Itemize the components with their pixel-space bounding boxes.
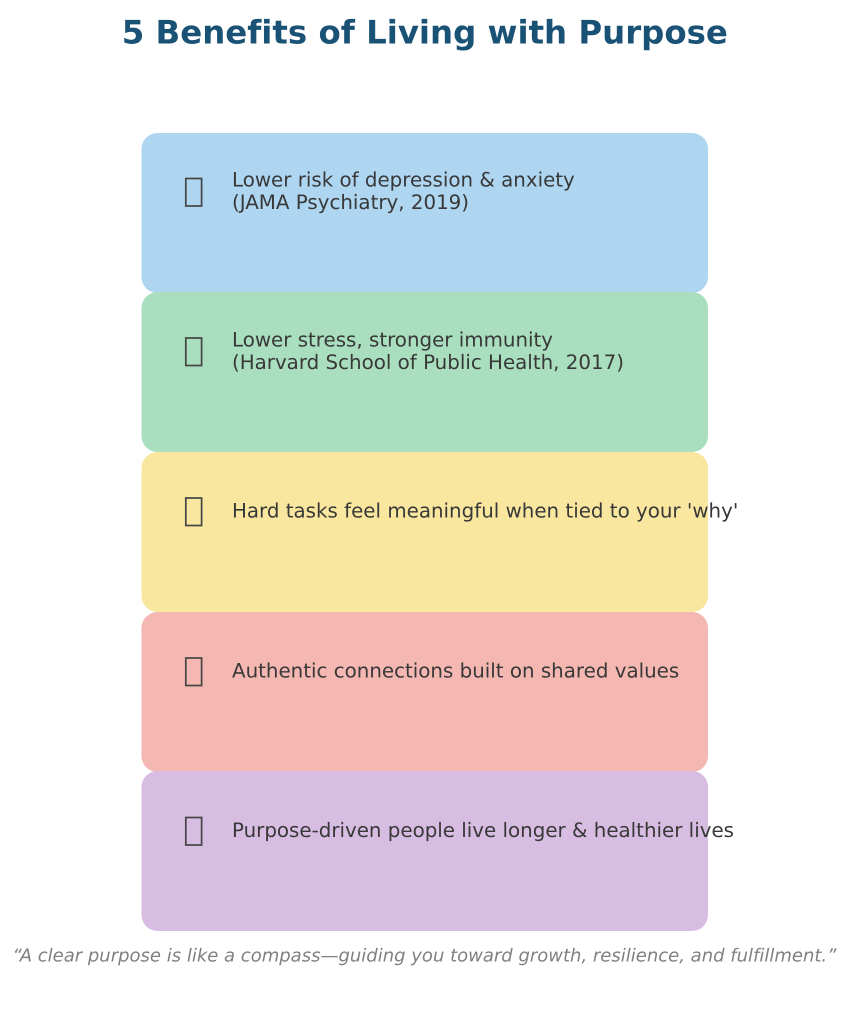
panel: lower stress and stronger immunity <box>142 292 708 452</box>
text: connections benefit: Authentic connections built on shared values <box>232 660 679 683</box>
title: 5 Benefits of Living with Purpose <box>122 13 728 51</box>
quote: “A clear purpose is like a compass—guiding you toward growth, resilience, and fulfillment.” <box>13 946 837 967</box>
panel: authentic connections <box>142 612 708 772</box>
icon: missing glyph box <box>186 658 202 686</box>
panel: longer healthier lives <box>142 771 734 931</box>
icon: missing glyph box <box>186 818 202 845</box>
text: meaning benefit: Hard tasks feel meaningful when tied to your 'why' <box>232 500 738 523</box>
text: longevity benefit: Purpose-driven people live longer & healthier lives <box>232 819 734 842</box>
icon: missing glyph box <box>186 178 202 206</box>
text: stress benefit: (Harvard School of Public Health, 2017) <box>232 351 624 374</box>
text: stress benefit: Lower stress, stronger immunity <box>232 329 553 352</box>
text: depression benefit: (JAMA Psychiatry, 2019) <box>232 191 469 214</box>
icon: missing glyph box <box>186 498 202 526</box>
panel: lower risk of depression and anxiety <box>142 133 708 293</box>
panel: hard tasks feel meaningful <box>142 452 738 612</box>
text: depression benefit: Lower risk of depression & anxiety <box>232 169 575 192</box>
icon: missing glyph box <box>186 338 202 366</box>
